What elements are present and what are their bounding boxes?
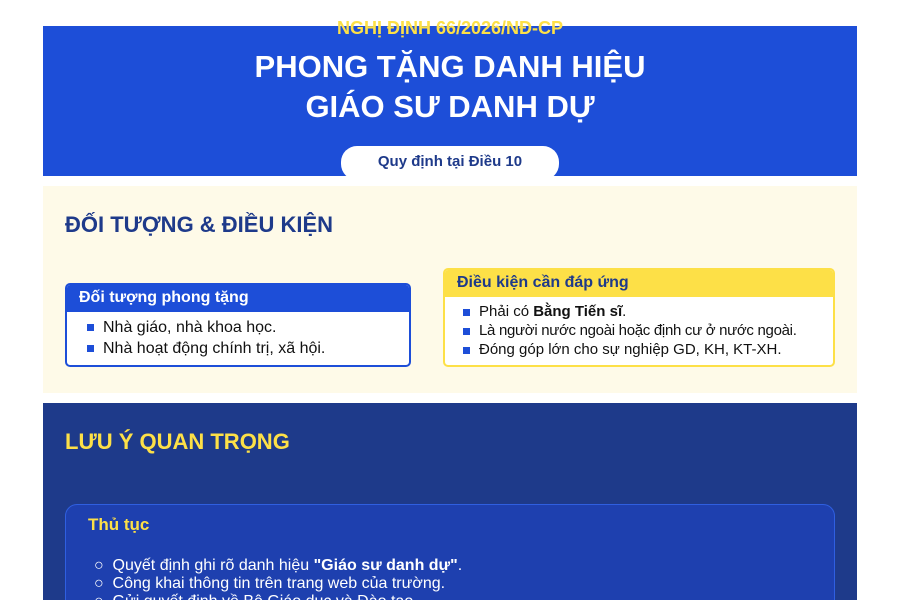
heading: LƯU Ý QUAN TRỌNG <box>65 429 290 454</box>
card: subjects <box>65 283 411 367</box>
panel: subjects & conditions <box>43 186 857 393</box>
card: conditions: Là người nước ngoài hoặc định cư ở nước ngoài. <box>479 322 797 339</box>
card: subjects: Nhà giáo, nhà khoa học. <box>103 319 276 336</box>
card: procedure: Thủ tục <box>88 515 149 534</box>
card: conditions <box>443 268 835 367</box>
pill: article <box>341 146 559 180</box>
card: procedure <box>65 504 835 600</box>
header banner <box>43 26 857 176</box>
heading: ĐỐI TƯỢNG & ĐIỀU KIỆN <box>65 212 333 237</box>
title: GIÁO SƯ DANH DỰ <box>305 89 595 124</box>
pill: article: Quy định tại Điều 10 <box>378 153 522 170</box>
card: conditions: Đóng góp lớn cho sự nghiệp GD, KH, KT-XH. <box>479 341 782 358</box>
card: procedure: ○ Quyết định ghi rõ danh hiệu "Giáo sư danh dự". <box>94 557 462 574</box>
panel: important notes <box>43 403 857 600</box>
card: subjects: Nhà hoạt động chính trị, xã hội. <box>103 340 325 357</box>
card: conditions: Phải có Bằng Tiến sĩ. <box>479 303 626 320</box>
card: procedure: ○ Công khai thông tin trên trang web của trường. <box>94 575 445 592</box>
subtitle: decree number: NGHỊ ĐỊNH 66/2026/NĐ-CP <box>337 18 563 38</box>
card: conditions: Điều kiện cần đáp ứng <box>457 274 629 291</box>
title: PHONG TẶNG DANH HIỆU <box>255 49 645 84</box>
title <box>255 49 645 124</box>
card: subjects: Đối tượng phong tặng <box>79 289 249 306</box>
